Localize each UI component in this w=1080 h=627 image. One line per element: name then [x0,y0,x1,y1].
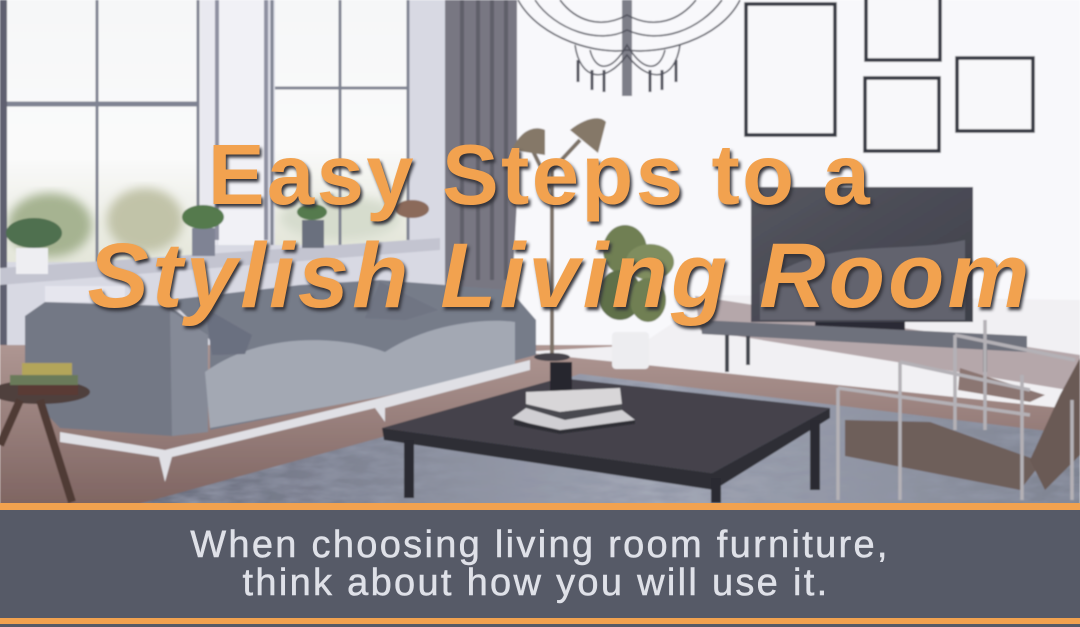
frames [746,0,1033,151]
TV and stand [751,187,973,322]
floor [0,345,1080,510]
lamp [530,140,580,355]
caption line 1: When choosing living room furniture, [190,524,890,566]
coffee table [382,378,830,503]
rug [135,374,1080,505]
potted plant [598,225,674,369]
caption line 2: think about how you will use it. [243,562,829,604]
chair [838,320,1080,500]
sofa [25,280,536,482]
windows [0,0,440,380]
curtain [445,0,517,290]
books and cup [512,362,635,434]
caption band [0,503,1080,627]
sill plants [16,248,48,274]
title line 2: Stylish Living Room [87,225,1033,327]
chandelier [518,0,740,96]
side table [0,363,90,502]
title line 1: Easy Steps to a [208,128,872,223]
